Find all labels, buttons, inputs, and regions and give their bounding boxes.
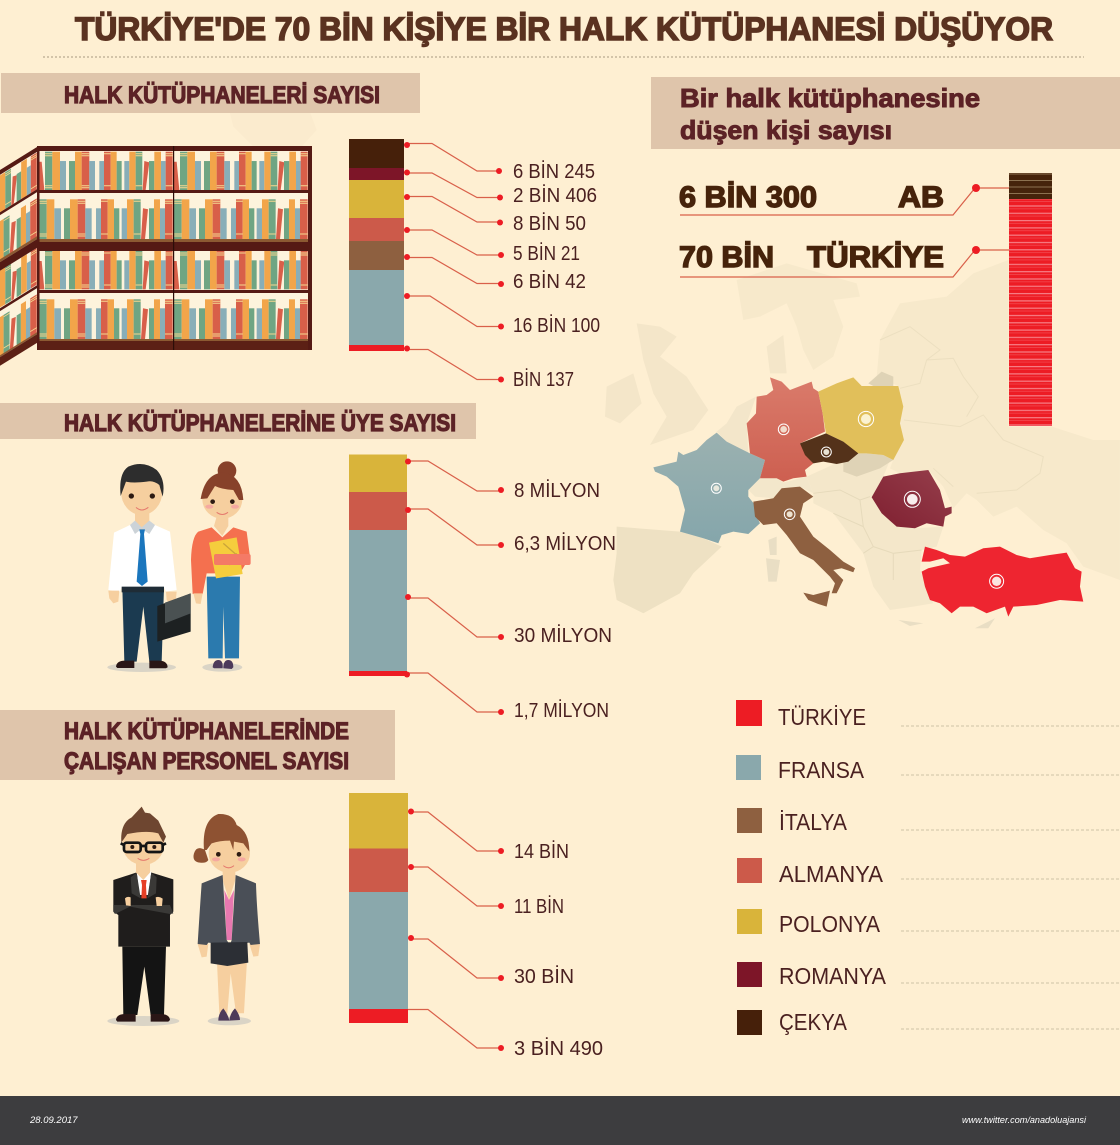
- comparison: AB and Türkiye values: AB: [898, 181, 944, 214]
- country: Romania: [872, 470, 952, 528]
- comparison: AB and Türkiye values: 70 BİN: [679, 241, 774, 274]
- bar chart: library count: 16 BİN 100: [513, 314, 600, 337]
- bar chart: members: 30 MİLYON: [514, 624, 612, 647]
- country: Czechia: [800, 433, 858, 464]
- icon: man and woman staff: [107, 807, 260, 1026]
- bar chart: staff: 3 BİN 490: [514, 1037, 603, 1060]
- bar chart: library count: BİN 137: [513, 368, 574, 391]
- panel: persons per library heading: [651, 77, 1120, 149]
- bar chart: library count: [349, 139, 600, 391]
- legend: İTALYA: [779, 809, 848, 835]
- map markers: [711, 411, 1004, 588]
- icon: bookshelf: [0, 146, 312, 366]
- map: highlighted countries: [653, 377, 1083, 617]
- title: TÜRKİYE'DE 70 BİN KİŞİYE BİR HALK KÜTÜPHANESİ DÜŞÜYOR: [75, 11, 1053, 47]
- panel: members heading: HALK KÜTÜPHANELERİNE ÜYE SAYISI: [64, 410, 456, 437]
- bar chart: members: [349, 454, 616, 722]
- icon: man and woman members: [107, 461, 251, 672]
- panel: library count heading: [1, 73, 420, 113]
- bar chart: members: 6,3 MİLYON: [514, 532, 616, 555]
- background map: Europe in beige: [227, 93, 1120, 628]
- panel: staff heading: [0, 710, 395, 780]
- country: Turkey: [922, 547, 1083, 617]
- legend: ÇEKYA: [779, 1009, 848, 1035]
- bar chart: library count: 6 BİN 42: [513, 270, 586, 293]
- legend: ROMANYA: [779, 963, 887, 989]
- comparison: AB and Türkiye values: TÜRKİYE: [807, 241, 944, 274]
- legend: TÜRKİYE: [778, 704, 866, 730]
- panel: persons per library heading: düşen kişi sayısı: [680, 115, 892, 145]
- bar chart: library count: 6 BİN 245: [513, 160, 595, 183]
- comparison: AB and Türkiye values: [679, 181, 1009, 277]
- bar chart: library count: 2 BİN 406: [513, 184, 597, 207]
- panel: persons per library heading: Bir halk kütüphanesine: [680, 83, 980, 113]
- bar chart: staff: 11 BİN: [514, 895, 564, 918]
- legend: [736, 700, 1120, 1035]
- panel: staff heading: ÇALIŞAN PERSONEL SAYISI: [64, 748, 349, 775]
- country: Germany: [747, 377, 825, 482]
- bar chart: library count: 8 BİN 50: [513, 212, 586, 235]
- legend: FRANSA: [778, 757, 865, 783]
- legend: POLONYA: [779, 911, 881, 937]
- country: Italy: [753, 487, 855, 607]
- footer: www.twitter.com/anadoluajansi: [962, 1115, 1087, 1126]
- country: France: [653, 433, 765, 543]
- bar chart: members: 8 MİLYON: [514, 479, 600, 502]
- bar chart: library count: 5 BİN 21: [513, 242, 580, 265]
- country: Poland: [818, 377, 904, 460]
- bar chart: persons per library: [1009, 173, 1052, 426]
- footer: [0, 1096, 1120, 1145]
- footer: 28.09.2017: [29, 1115, 78, 1126]
- bar chart: members: 1,7 MİLYON: [514, 699, 609, 722]
- bar chart: staff: 14 BİN: [514, 840, 569, 863]
- legend: ALMANYA: [779, 861, 884, 887]
- panel: members heading: [0, 403, 476, 439]
- comparison: AB and Türkiye values: 6 BİN 300: [679, 181, 817, 214]
- panel: staff heading: HALK KÜTÜPHANELERİNDE: [64, 718, 349, 745]
- bar chart: staff: [349, 793, 603, 1060]
- bar chart: staff: 30 BİN: [514, 965, 574, 988]
- panel: library count heading: HALK KÜTÜPHANELERİ SAYISI: [64, 82, 380, 109]
